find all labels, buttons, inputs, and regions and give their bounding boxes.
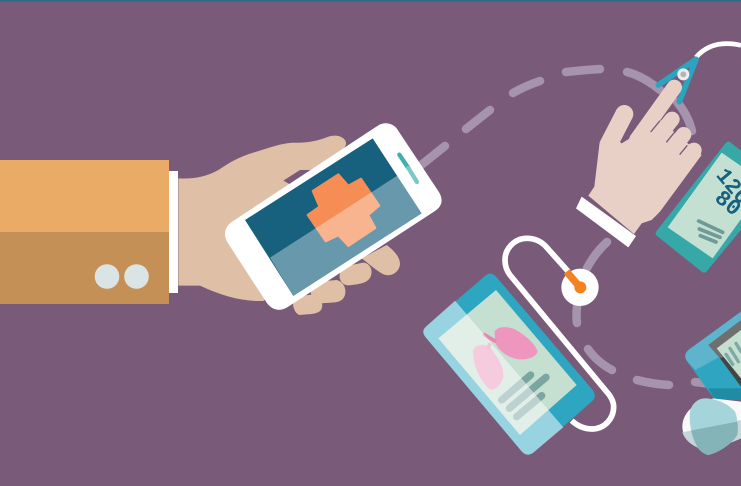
device light upper part — [685, 312, 741, 370]
plug connector — [561, 269, 599, 306]
hand holding phone — [178, 136, 400, 315]
device dark bottom band — [708, 388, 741, 400]
dashed connection path — [415, 69, 720, 385]
device screen — [717, 330, 741, 378]
device frame — [708, 320, 741, 383]
tablet screen — [438, 290, 577, 435]
tablet body — [423, 274, 595, 455]
data bars — [502, 375, 546, 417]
lung scan tablet — [423, 274, 595, 455]
capsule — [682, 398, 741, 455]
clip pivot — [677, 68, 689, 80]
finger clip arms — [658, 59, 696, 102]
fingers — [608, 87, 694, 197]
smartphone — [225, 123, 442, 310]
phone body — [225, 123, 442, 310]
device bars — [726, 343, 741, 364]
bottom right device — [685, 312, 741, 400]
shirt cuff — [576, 197, 636, 247]
hand with cuff — [588, 87, 702, 234]
blood pressure monitor — [659, 145, 741, 269]
sleeve — [0, 160, 169, 304]
cuff buttons — [95, 264, 149, 289]
monitor bars — [699, 221, 723, 242]
medical cross — [308, 174, 379, 246]
capsule teal overlay — [690, 398, 738, 455]
shirt cuff — [169, 171, 178, 293]
screen lighter half — [270, 176, 422, 296]
tablet lighter half — [423, 301, 563, 455]
top edge line — [0, 0, 741, 2]
lungs — [473, 327, 538, 390]
capsule body — [682, 398, 741, 448]
speaker — [399, 155, 417, 182]
clip wire — [696, 44, 741, 57]
monitor screen — [668, 153, 741, 258]
wire to lung phone — [505, 238, 614, 429]
device body — [685, 312, 741, 400]
palm — [588, 120, 702, 234]
phone screen — [245, 138, 422, 296]
finger creases — [651, 121, 687, 155]
finger clip and monitor — [576, 44, 741, 269]
fingers — [362, 245, 400, 275]
